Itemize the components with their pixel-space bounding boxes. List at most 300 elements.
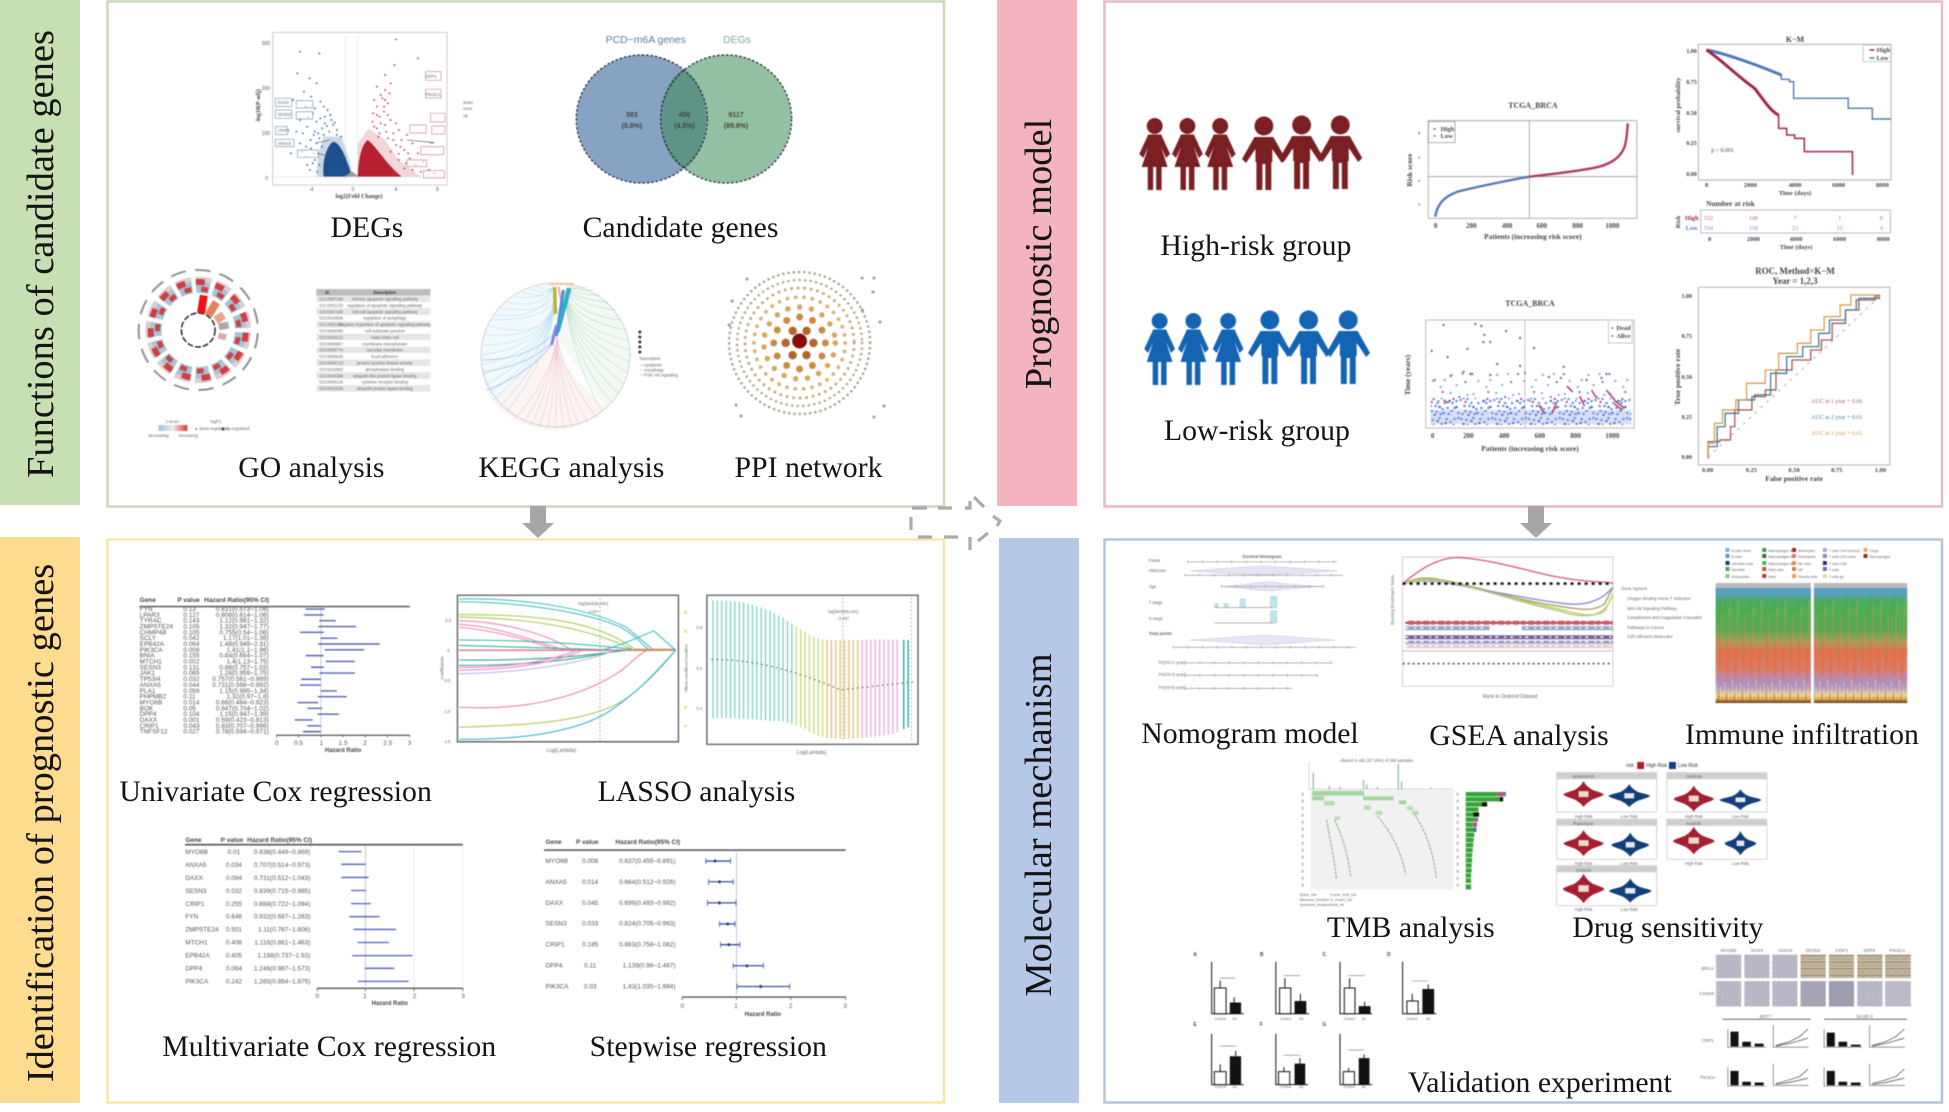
chart: multivariate Cox forest plot: MYO6B [185, 849, 208, 856]
chart: immune infiltration stacked bars: Tregs [1869, 549, 1878, 553]
chart: immune infiltration stacked bars: B cells naive [1731, 549, 1751, 553]
chart: validation qPCR bars: BC [1233, 1017, 1238, 1021]
chart: GSEA enrichment: Wnt Akt Signaling Pathway [1627, 606, 1678, 611]
chart: ROC curve: AUC at 1 year = 0.66 [1811, 399, 1862, 405]
chart: drug sensitivity violins: Low Risk [1621, 907, 1639, 912]
chart: univariate Cox forest plot: BNIA [140, 653, 155, 660]
chart: multivariate Cox forest plot: 0.707(0.514~0.973) [254, 862, 310, 869]
table: GO terms: GO:0019902 [319, 367, 344, 372]
chart: LASSO coefficient paths: -1.0 [443, 709, 451, 714]
table: GO terms: GO:0030055 [319, 328, 344, 334]
chart: Kaplan-Meier curve: 2000 [1744, 182, 1757, 189]
chart: candidate genes Venn diagram: PCD−m6A genes [606, 35, 686, 46]
chart: LASSO cross-validation: log(lambda.min) [828, 609, 859, 614]
chart: multivariate Cox forest plot: 0.638(0.449~0.869) [254, 849, 310, 856]
chart: DEGs volcano plot: 200 [262, 86, 270, 92]
chart: univariate Cox forest plot: 1.32(0.97~1.8) [227, 694, 269, 701]
chart: univariate Cox forest plot: 2.5 [383, 740, 393, 747]
chart: LASSO coefficient paths: log(lambda.min) [578, 601, 609, 606]
chart: drug sensitivity violins: Low Risk [1678, 763, 1698, 769]
sidebar: molecular mechanism [999, 538, 1079, 1103]
label: GO analysis: GO analysis [238, 451, 385, 484]
chart: validation qPCR bars: E [1193, 1022, 1197, 1028]
chart: stepwise regression forest plot: 0.033 [582, 921, 599, 928]
chart: univariate Cox forest plot: TP53I4 [140, 676, 161, 683]
chart: stepwise regression forest plot: CRIP1 [546, 942, 565, 949]
chart: multivariate Cox forest plot: 1 [363, 993, 367, 1000]
chart: univariate Cox forest plot: 0.014 [183, 699, 200, 706]
chart: DEGs volcano plot: -4 [309, 187, 314, 193]
chart: multivariate Cox forest plot: Hazard Ratio(95% CI) [247, 837, 312, 844]
chart: univariate Cox forest plot: PHPMB2 [140, 694, 167, 701]
chart: DEGs volcano plot: 0 [352, 187, 355, 193]
chart: DEGs volcano plot: 8 [436, 187, 439, 193]
chart: candidate genes Venn diagram: DEGs [723, 35, 751, 46]
chart: PPI network [729, 272, 884, 417]
chart: candidate genes Venn diagram: 456 [679, 112, 690, 119]
chart: multivariate Cox forest plot: 0.888(0.722~1.094) [254, 901, 310, 908]
chart: drug sensitivity violins: Erlotinib [1576, 868, 1592, 873]
chart: immune infiltration stacked bars: Mast cells [1768, 568, 1784, 572]
chart: univariate Cox forest plot: ZMPSTE24 [140, 624, 173, 631]
chart: LASSO cross-validation: 0.8 [696, 625, 703, 630]
label: KEGG analysis: KEGG analysis [478, 451, 664, 484]
chart: GO circular plot: down-regulated [199, 426, 229, 431]
chart: validation qPCR bars: BC [1426, 1017, 1432, 1021]
chart: ROC curve: AUC at 3 year = 0.61 [1811, 431, 1862, 437]
chart: multivariate Cox forest plot: MTCH1 [185, 940, 208, 947]
chart: validation qPCR bars: BC [1362, 1085, 1367, 1089]
chart: univariate Cox forest plot: CRIP1 [140, 723, 159, 730]
sidebar: molecular mechanism: Molecular mechanism [1018, 653, 1060, 997]
chart: GO circular plot: z-score [166, 419, 180, 424]
chart: validation qPCR bars: F [1260, 1022, 1263, 1028]
chart: stepwise regression forest plot: DAXX [546, 900, 564, 907]
chart: drug sensitivity violins: High Risk [1685, 861, 1704, 866]
chart: survival status scatter: 800 [1570, 432, 1581, 440]
chart: multivariate Cox forest plot: 0.839(0.715~0.985) [254, 888, 310, 895]
chart: multivariate Cox forest plot: 0.501 [226, 927, 242, 934]
table: GO terms: GO:0005925 [319, 354, 344, 359]
chart: validation qPCR bars: Control [1215, 1017, 1226, 1021]
chart: univariate Cox forest plot: 1.32(0.947~1.77) [219, 624, 269, 631]
chart: ROC curve: True positive rate [1673, 348, 1682, 405]
chart: stepwise regression forest plot: 0.699(0.493~0.992) [619, 900, 676, 907]
chart: LASSO coefficient paths: Log(Lambda) [547, 748, 576, 754]
table: number at risk: 6000 [1833, 236, 1846, 243]
chart: multivariate Cox forest plot: 0.408 [226, 940, 242, 947]
chart: survival status scatter: Alive [1616, 333, 1631, 340]
chart: risk score curve: High [1441, 126, 1455, 133]
chart: risk score curve: 0 [1434, 222, 1438, 230]
chart: immune infiltration stacked bars: T cells gd [1829, 575, 1844, 579]
chart: univariate Cox forest plot: SCLY [140, 635, 157, 642]
chart: drug sensitivity violins [1557, 762, 1767, 912]
chart: KEGG chord network: Description [640, 356, 661, 361]
chart: survival status scatter: 400 [1499, 432, 1510, 440]
chart: IHC images and cell assays: ANXA5 [1778, 948, 1793, 953]
chart: multivariate Cox forest plot: 1.198(0.737~1.93) [258, 953, 310, 960]
chart: drug sensitivity violins: Low Risk [1732, 814, 1750, 819]
chart: multivariate Cox forest plot: 0.034 [226, 862, 242, 869]
chart: univariate Cox forest plot: 0.127 [183, 612, 200, 619]
chart: validation qPCR bars: C [1322, 952, 1326, 958]
chart: univariate Cox forest plot: 0.59(0.423~0.813) [216, 717, 269, 724]
chart: survival status scatter: 200 [1463, 432, 1474, 440]
chart: LASSO cross-validation [683, 595, 918, 756]
chart: multivariate Cox forest plot: 0.255 [226, 901, 242, 908]
chart: DEGs volcano plot: PIK3CA [425, 92, 440, 97]
chart: univariate Cox forest plot: 0.5 [294, 740, 303, 747]
chart: candidate genes Venn diagram: (4.5%) [674, 123, 695, 130]
sidebar: functions of candidate genes: Functions of candidate genes [20, 30, 62, 478]
chart: univariate Cox forest plot: 0 [275, 740, 279, 747]
chart: ROC curve: 0.25 [1746, 467, 1757, 474]
chart: TMB oncoplot: Splice_Site [1300, 893, 1317, 897]
table: GO terms: protein tyrosine kinase activity [357, 360, 413, 366]
chart: DEGs volcano plot: down [463, 100, 474, 105]
chart: survival status scatter: 600 [1535, 432, 1546, 440]
chart: validation qPCR bars: Control [1344, 1085, 1355, 1089]
chart: ROC curve: 0.50 [1682, 375, 1692, 381]
chart: validation qPCR bars: Control [1280, 1017, 1292, 1021]
chart: stepwise regression forest plot: 0.014 [582, 879, 599, 886]
chart: immune infiltration stacked bars: Macrophages M2 [1768, 562, 1795, 566]
chart: candidate genes Venn diagram: 9117 [729, 112, 744, 119]
chart: GO circular plot [136, 267, 261, 438]
chart: nomogram: riskScore [1149, 568, 1167, 573]
chart: Kaplan-Meier curve: 0.00 [1686, 172, 1697, 178]
chart: immune infiltration stacked bars: B cells [1731, 555, 1742, 559]
chart: univariate Cox forest plot: 1.4(1.13~1.75) [227, 659, 269, 666]
chart: immune infiltration stacked bars: T cells CD4 naive [1829, 555, 1856, 559]
chart: survival status scatter: TCGA_BRCA [1505, 299, 1555, 308]
chart: TMB oncoplot: Altered in 481 (97.18%) of 495 samples. [1340, 758, 1414, 763]
chart: GSEA enrichment [1390, 557, 1702, 700]
chart: LASSO cross-validation: 0.4 [696, 706, 703, 711]
chart: DEGs volcano plot [255, 32, 474, 200]
chart: DEGs volcano plot: 4 [394, 187, 397, 193]
label: low-risk group: Low-risk group [1164, 414, 1350, 447]
chart: multivariate Cox forest plot: Hazard Ratio [372, 1001, 408, 1007]
chart: univariate Cox forest plot: Hazard Ratio(95% CI) [204, 597, 269, 604]
chart: univariate Cox forest plot: ANXA5 [140, 682, 161, 689]
chart: survival status scatter: 1000 [1605, 432, 1620, 440]
chart: DEGs volcano plot: 300 [262, 41, 270, 47]
chart: stepwise regression forest plot [544, 839, 847, 1018]
chart: univariate Cox forest plot: 1.5 [339, 740, 348, 747]
chart: stepwise regression forest plot: Gene [546, 839, 562, 846]
chart: multivariate Cox forest plot: 0.731(0.512~1.043) [254, 875, 310, 882]
table: GO terms: GO:2001234 [319, 322, 344, 327]
chart: univariate Cox forest plot: MYO6B [140, 699, 162, 706]
chart: GSEA enrichment: Complement and Coagulation Cascades [1627, 615, 1702, 620]
chart: univariate Cox forest plot: 0.105 [183, 629, 200, 636]
chart: survival status scatter: 0 [1431, 432, 1435, 440]
chart: drug sensitivity violins: Bortezomib [1573, 774, 1595, 779]
chart: drug sensitivity violins: High Risk [1575, 814, 1593, 819]
chart: immune infiltration stacked bars: T cells CD8 [1829, 562, 1847, 566]
chart: IHC images and cell assays: BRCA [1701, 966, 1714, 971]
chart: IHC images and cell assays: CRIP1 [1702, 1038, 1714, 1043]
chart: nomogram: Pr(OS<1 year) [1159, 660, 1186, 665]
chart: TMB oncoplot [1300, 758, 1506, 907]
chart: stepwise regression forest plot: 0.185 [582, 942, 599, 949]
table: GO terms: ID [325, 290, 329, 295]
chart: stepwise regression forest plot: 2 [789, 1003, 793, 1010]
chart: LASSO coefficient paths: 0.5 [445, 618, 452, 623]
chart: immune infiltration stacked bars: Macrophages M0 [1768, 549, 1795, 553]
chart: univariate Cox forest plot: 0.059 [183, 688, 200, 695]
arrow: dashed arrow linking left column to right column [911, 497, 1000, 550]
chart: immune infiltration stacked bars: T cells CD4 memory [1829, 549, 1860, 553]
chart: stepwise regression forest plot: 0.045 [582, 900, 599, 907]
chart: ROC curve: 0.75 [1831, 467, 1842, 474]
chart: TMB oncoplot: Multi_Hit [1330, 903, 1344, 907]
panel: prognostic model [1104, 2, 1942, 506]
chart: multivariate Cox forest plot: 2 [413, 993, 417, 1000]
chart: univariate Cox forest plot: LPAR3 [140, 612, 160, 619]
chart: immune infiltration stacked bars: T cells [1829, 568, 1839, 572]
chart: Kaplan-Meier curve: p < 0.001 [1711, 148, 1734, 154]
chart: univariate Cox forest plot: 0.11 [183, 694, 196, 701]
chart: GO circular plot: decreasing [148, 433, 169, 438]
chart: risk score curve: 1000 [1605, 222, 1620, 230]
chart: univariate Cox forest plot: 0.78(0.594~0.971) [216, 729, 269, 736]
chart: stepwise regression forest plot: 0.664(0.512~0.926) [619, 879, 676, 886]
chart: KEGG chord network [481, 283, 678, 430]
chart: DEGs volcano plot: -log10(P-adj) [255, 89, 262, 123]
chart: validation qPCR bars: Control [1280, 1085, 1292, 1089]
chart: risk score curve [1405, 101, 1637, 241]
chart: univariate Cox forest plot: TNFSF12 [140, 729, 168, 736]
chart: validation qPCR bars [1193, 952, 1436, 1089]
chart: validation qPCR bars: Control [1344, 1017, 1355, 1021]
chart: univariate Cox forest plot: 0.032 [183, 676, 200, 683]
label: stepwise regression: Stepwise regression [590, 1030, 827, 1063]
chart: univariate Cox forest plot: 0.83(0.707~0.996) [216, 723, 269, 730]
table: GO terms: cell-cell apoptotic signaling pathway [352, 309, 419, 314]
table: number at risk: 15 [1837, 226, 1843, 232]
table: number at risk: 534 [1704, 226, 1713, 232]
label: immune infiltration: Immune infiltration [1685, 718, 1919, 751]
chart: univariate Cox forest plot: 0.009 [183, 647, 200, 654]
table: GO terms: negative regulation of apoptotic signaling pathway [339, 322, 432, 327]
chart: Kaplan-Meier curve: K−M [1786, 35, 1805, 44]
chart: multivariate Cox forest plot: EPB42A [185, 953, 210, 960]
icon: high-risk group people [1139, 116, 1362, 190]
chart: survival status scatter [1403, 299, 1634, 453]
sidebar: identification of prognostic genes: Identification of prognostic genes [20, 564, 62, 1082]
chart: stepwise regression forest plot: 3 [843, 1003, 847, 1010]
table: number at risk: 1 [1838, 216, 1841, 222]
chart: univariate Cox forest plot: 0.104 [183, 711, 200, 718]
chart: univariate Cox forest plot: 0.847(0.704~1.02) [216, 705, 269, 712]
label: PPI network: PPI network [735, 451, 883, 484]
chart: Kaplan-Meier curve: 0.50 [1686, 111, 1697, 117]
chart: Kaplan-Meier curve: 0 [1705, 182, 1708, 189]
chart: ROC curve: 0.75 [1682, 334, 1692, 340]
chart: IHC images and cell assays: DAXX [1751, 948, 1763, 953]
label: candidate genes: Candidate genes [583, 211, 778, 244]
table: number at risk: 23 [1792, 226, 1798, 232]
chart: validation qPCR bars: BC [1299, 1017, 1304, 1021]
table: number at risk: 4 [1880, 226, 1883, 232]
chart: GSEA enrichment: Pathways in Cancer [1627, 625, 1665, 630]
chart: stepwise regression forest plot: SESN3 [546, 921, 567, 928]
chart: DEGs volcano plot: up [463, 113, 468, 118]
chart: LASSO cross-validation: Log(Lambda) [797, 750, 827, 756]
sidebar: functions of candidate genes [0, 0, 80, 505]
chart: ROC curve: 0.00 [1702, 467, 1713, 474]
table: number at risk: 532 [1704, 216, 1713, 222]
chart: validation qPCR bars: Control [1406, 1017, 1418, 1021]
table: GO terms: GO:0004713 [319, 360, 344, 366]
chart: univariate Cox forest plot [139, 597, 412, 754]
chart: Kaplan-Meier curve: Low [1876, 55, 1889, 62]
chart: drug sensitivity violins: Low Risk [1621, 861, 1639, 866]
chart: immune infiltration stacked bars: Macrophages M1 [1768, 555, 1795, 559]
chart: ROC curve: ROC, Method=K−M [1755, 266, 1835, 276]
chart: risk score curve: Low [1441, 133, 1453, 140]
chart: DEGs volcano plot: ANXA5 [278, 141, 292, 146]
table: GO terms: GO:0005774 [319, 348, 344, 353]
chart: univariate Cox forest plot: 0.105 [183, 624, 200, 631]
chart: LASSO coefficient paths: -3.467 [588, 609, 599, 614]
chart: multivariate Cox forest plot: 1.265(0.854~1.875) [254, 978, 310, 986]
sidebar: identification of prognostic genes [0, 537, 80, 1103]
chart: univariate Cox forest plot: BOK [140, 705, 154, 712]
chart: GO circular plot: increasing [179, 433, 198, 438]
panel: molecular mechanism [1104, 540, 1942, 1102]
table: GO terms: regulation of autophagy [363, 316, 407, 321]
chart: KEGG chord network: PI3K-Akt signaling [644, 372, 678, 378]
table: GO terms: intrinsic apoptotic signaling pathway [352, 296, 419, 302]
chart: stepwise regression forest plot: 0.008 [582, 858, 599, 865]
table: GO terms: GO:0044389 [319, 373, 344, 378]
chart: univariate Cox forest plot: 0.731(0.568~0.992) [212, 682, 269, 689]
chart: validation qPCR bars: G [1322, 1022, 1326, 1028]
chart: multivariate Cox forest plot: P value [221, 837, 244, 844]
chart: stepwise regression forest plot: 1.139(0.96~1.467) [623, 962, 676, 970]
chart: univariate Cox forest plot: 0.155 [183, 653, 200, 660]
chart: stepwise regression forest plot: 0.11 [584, 962, 597, 970]
chart: stepwise regression forest plot: PIK3CA [546, 983, 569, 990]
chart: immune infiltration stacked bars: Plasma cells [1798, 575, 1818, 579]
chart: univariate Cox forest plot: 2 [363, 740, 367, 747]
table: GO terms: GO:0031625 [319, 386, 344, 391]
chart: univariate Cox forest plot: DAXX [140, 717, 158, 724]
chart: univariate Cox forest plot: 1.15(0.995~1.34) [219, 688, 269, 695]
chart: univariate Cox forest plot: PIK3CA [140, 647, 163, 654]
chart: survival status scatter: Dead [1616, 325, 1631, 332]
chart: multivariate Cox forest plot [185, 837, 465, 1007]
chart: KEGG chord network: Apoptosis [644, 362, 662, 368]
chart: multivariate Cox forest plot: 0.405 [226, 953, 242, 960]
chart: nomogram [1149, 554, 1356, 690]
chart: univariate Cox forest plot: 0.757(0.561~0.989) [212, 676, 269, 683]
sidebar: prognostic model: Prognostic model [1018, 119, 1060, 389]
chart: nomogram: T stage [1149, 600, 1163, 605]
chart: KEGG chord network: Autophagy [644, 367, 665, 373]
sidebar: prognostic model [997, 0, 1077, 506]
table: number at risk: 4000 [1790, 236, 1802, 243]
chart: multivariate Cox forest plot: Gene [185, 837, 202, 844]
chart: univariate Cox forest plot: FYN [140, 606, 153, 613]
chart: univariate Cox forest plot: Gene [140, 597, 156, 604]
chart: ROC curve: False positive rate [1765, 474, 1823, 483]
table: number at risk: 148 [1749, 216, 1758, 222]
table: number at risk: High [1685, 215, 1699, 222]
table: GO terms: vacuolar membrane [366, 348, 404, 353]
table: number at risk: 158 [1749, 226, 1758, 232]
table: number at risk: 2000 [1747, 236, 1760, 243]
chart: stepwise regression forest plot: DPP4 [546, 962, 563, 970]
chart: univariate Cox forest plot: Hazard Ratio [325, 748, 362, 754]
arrow: down arrow from prognostic model to molecular mechanism [1520, 506, 1552, 538]
chart: risk score curve: Risk score [1405, 153, 1414, 186]
chart: LASSO coefficient paths: -0.5 [443, 678, 451, 683]
chart: risk score curve: 800 [1572, 222, 1583, 230]
chart: univariate Cox forest plot: 0.66(0.484~0.923) [216, 699, 269, 706]
chart: multivariate Cox forest plot: SESN3 [185, 888, 207, 895]
chart: LASSO coefficient paths: Coefficients [439, 656, 444, 680]
table: GO terms: GO:0010506 [319, 316, 344, 321]
chart: Kaplan-Meier curve: 1.00 [1686, 49, 1697, 55]
chart: stepwise regression forest plot: ANXA5 [546, 879, 567, 886]
chart: validation qPCR bars: BC [1362, 1017, 1367, 1021]
chart: immune infiltration stacked bars: Dendritic [1731, 568, 1745, 572]
chart: multivariate Cox forest plot: 0.01 [228, 849, 241, 856]
chart: GSEA enrichment: Rank in Ordered Dataset [1483, 694, 1538, 700]
table: GO terms: GO:0005126 [319, 380, 344, 385]
chart: stepwise regression forest plot: 1 [734, 1003, 738, 1010]
chart: stepwise regression forest plot: Hazard Ratio [745, 1012, 781, 1018]
chart: multivariate Cox forest plot: CRIP1 [185, 901, 205, 908]
chart: DEGs volcano plot: CRIP1 [278, 128, 291, 133]
chart: DEGs volcano plot: log2(Fold Change) [335, 193, 383, 200]
table: GO terms: GO:2001233 [319, 303, 344, 308]
chart: ROC curve: Year = 1,2,3 [1772, 276, 1818, 286]
chart: stepwise regression forest plot: 0.824(0.705~0.963) [619, 921, 676, 928]
chart: candidate genes Venn diagram: 583 [626, 112, 638, 119]
chart: multivariate Cox forest plot: 0.646 [226, 914, 242, 921]
table: GO terms: membrane microdomain [362, 341, 408, 346]
chart: ROC curve [1673, 266, 1890, 483]
chart: validation qPCR bars: A [1193, 952, 1197, 958]
chart: LASSO coefficient paths: -1.5 [443, 739, 451, 744]
chart: ROC curve: 0.00 [1682, 455, 1692, 461]
chart: Kaplan-Meier curve [1675, 35, 1891, 197]
chart: univariate Cox forest plot: 0.84(0.664~1.07) [219, 653, 269, 660]
chart: immune infiltration stacked bars: Neutrophils [1798, 555, 1816, 559]
table: GO terms: GO:0097193 [319, 309, 344, 314]
chart: ROC curve: AUC at 2 year = 0.61 [1811, 415, 1862, 421]
chart: multivariate Cox forest plot: DAXX [185, 875, 204, 882]
chart: multivariate Cox forest plot: DPP4 [185, 966, 203, 973]
chart: univariate Cox forest plot: 0.831(0.573~1.08) [216, 606, 269, 613]
chart: multivariate Cox forest plot: 0.064 [226, 966, 242, 973]
table: GO terms: phosphatase binding [366, 367, 405, 372]
table: GO terms: ubiquitin protein ligase binding [357, 386, 413, 391]
label: validation experiment: Validation experiment [1408, 1066, 1672, 1099]
chart: IHC images and cell assays: MYO6B [1721, 948, 1736, 953]
chart: multivariate Cox forest plot: 0.084 [226, 875, 242, 882]
chart: univariate Cox forest plot: 0.131 [183, 664, 200, 671]
chart: GSEA enrichment: Cell Adhesion Molecules [1627, 634, 1673, 639]
chart: GO circular plot: logFC [211, 419, 222, 424]
chart: nomogram: Age [1149, 584, 1157, 589]
